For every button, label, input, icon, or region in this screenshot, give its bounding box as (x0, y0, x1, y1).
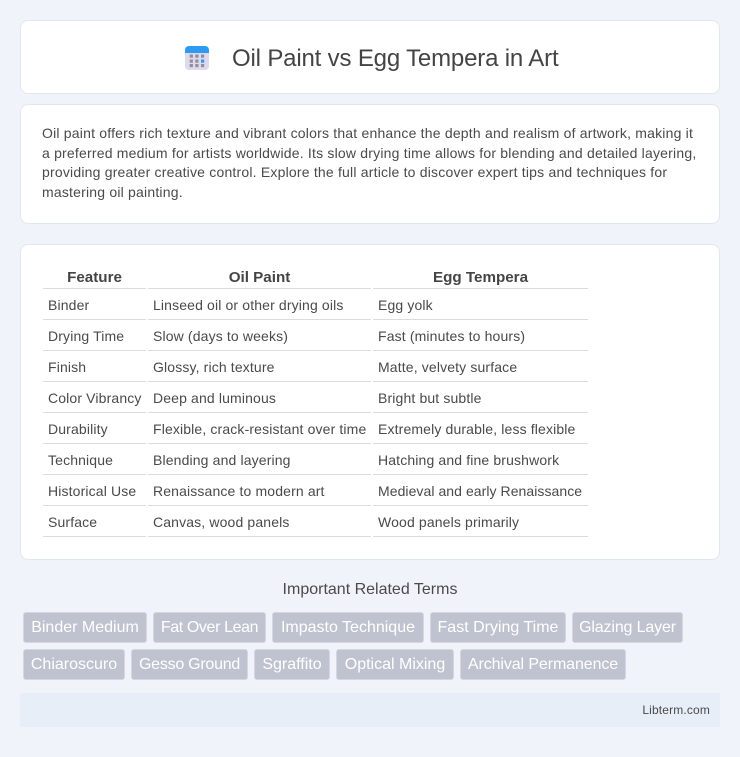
tag (460, 649, 626, 680)
title: Oil Paint vs Egg Tempera in Art (232, 45, 558, 72)
footer credit: Libterm.com (642, 703, 710, 717)
row: Durability: Flexible, crack-resistant over time (153, 421, 366, 437)
tag (254, 649, 330, 680)
row: Color Vibrancy: Color Vibrancy (48, 390, 142, 406)
tag: Impasto Technique (281, 619, 415, 636)
row: Finish: Glossy, rich texture (153, 359, 275, 375)
text block: introduction: providing greater creative control. Explore the full article to discover expert tips and techniques for (42, 164, 667, 180)
row: Color Vibrancy (48, 390, 482, 406)
panel: header (20, 20, 720, 94)
icon: calendar (185, 46, 209, 70)
row: Historical Use: Medieval and early Renaissance (378, 483, 582, 499)
row: Binder: Linseed oil or other drying oils (153, 297, 343, 313)
row: Surface (48, 514, 519, 530)
tag: Sgraffito (262, 656, 322, 673)
row: Drying Time: Fast (minutes to hours) (378, 328, 525, 344)
row: Surface: Wood panels primarily (378, 514, 519, 530)
row: Historical Use: Historical Use (48, 483, 136, 499)
row: Finish: Matte, velvety surface (378, 359, 517, 375)
tag: Optical Mixing (345, 656, 445, 673)
row: Technique: Technique (48, 452, 113, 468)
column headings (67, 269, 528, 286)
heading: related terms: Important Related Terms (283, 581, 457, 598)
row: Color Vibrancy: Deep and luminous (153, 390, 276, 406)
tag (23, 612, 147, 643)
tag (23, 649, 125, 680)
row: Finish: Finish (48, 359, 86, 375)
panel: comparison table (20, 244, 720, 560)
row: Color Vibrancy: Bright but subtle (378, 390, 482, 406)
tag (572, 612, 683, 643)
row: Surface: Surface (48, 514, 97, 530)
text block: introduction: a preferred medium for artists worldwide. Its slow drying time allows for blending and detailed layering, (42, 145, 696, 161)
tag: Chiaroscuro (31, 656, 117, 673)
column headings: Egg Tempera (433, 269, 528, 286)
row: Drying Time (48, 328, 525, 344)
tag: Binder Medium (31, 619, 139, 636)
row: Technique: Blending and layering (153, 452, 291, 468)
row: Drying Time: Slow (days to weeks) (153, 328, 288, 344)
tag: Archival Permanence (468, 656, 618, 673)
tag: Gesso Ground (139, 656, 240, 673)
text block: introduction (42, 125, 696, 200)
text block: introduction: Oil paint offers rich texture and vibrant colors that enhance the depth and realism of artwork, making it (42, 125, 693, 141)
tag: Fat Over Lean (161, 619, 258, 636)
row: Binder: Binder (48, 297, 89, 313)
tag (430, 612, 566, 643)
row: Drying Time: Drying Time (48, 328, 124, 344)
tag (272, 612, 424, 643)
column headings: Feature (67, 269, 122, 286)
comparison table (43, 269, 588, 537)
tag (153, 612, 266, 643)
column headings: Oil Paint (229, 269, 290, 286)
row: Durability: Durability (48, 421, 108, 437)
row: Binder: Egg yolk (378, 297, 433, 313)
panel: intro text (20, 104, 720, 224)
row: Finish (48, 359, 517, 375)
row: Technique: Hatching and fine brushwork (378, 452, 559, 468)
tag (131, 649, 248, 680)
text block: introduction: mastering oil painting. (42, 184, 183, 200)
row: Historical Use: Renaissance to modern art (153, 483, 325, 499)
tags: related terms (23, 612, 683, 680)
row: Binder (48, 297, 433, 313)
row: Surface: Canvas, wood panels (153, 514, 290, 530)
tag: Glazing Layer (579, 619, 676, 636)
row: Technique (48, 452, 560, 468)
row: Historical Use (48, 483, 582, 499)
row: Durability: Extremely durable, less flexible (378, 421, 575, 437)
tag (336, 649, 454, 680)
tag: Fast Drying Time (438, 619, 558, 636)
footer bar (20, 693, 720, 727)
row: Durability (48, 421, 575, 437)
